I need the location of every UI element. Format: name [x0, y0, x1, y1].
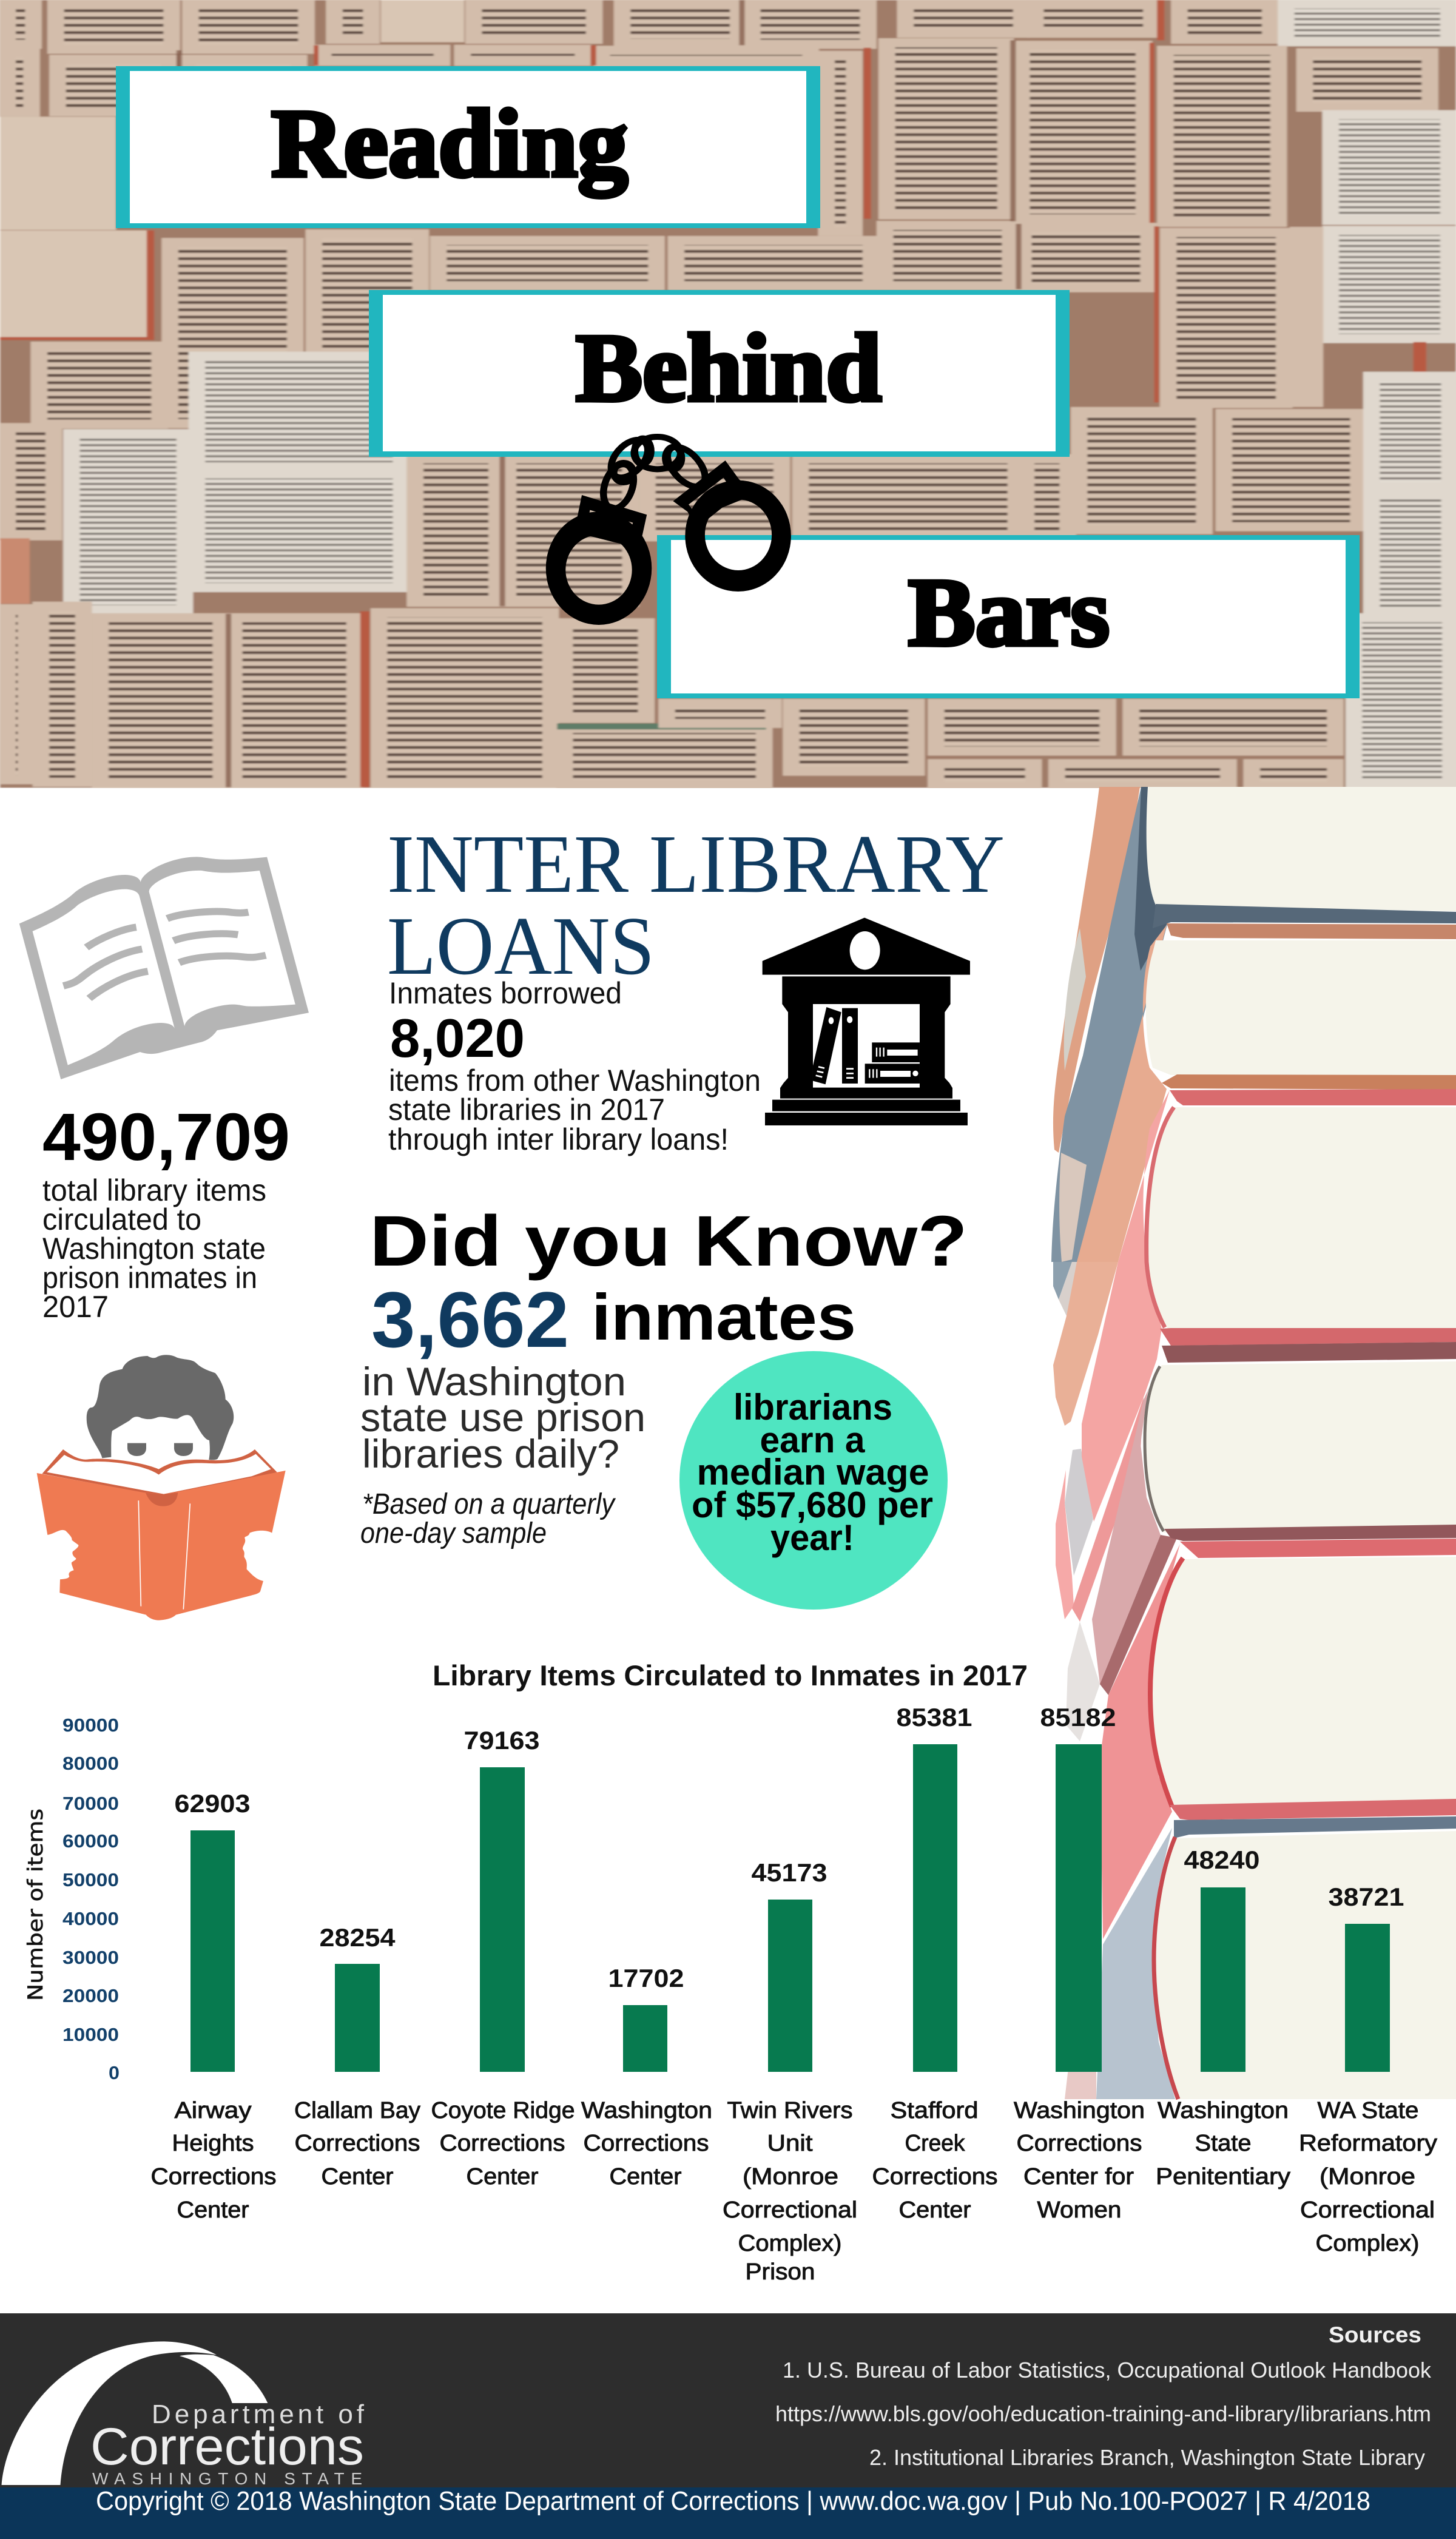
- logo: Department of Corrections: WASHINGTON STATE: [92, 2469, 362, 2488]
- callout: librarian median wage: median wage: [696, 1452, 929, 1492]
- photo: stack of books: [1051, 787, 1456, 2099]
- bar values: 85182: [1040, 1703, 1116, 1731]
- category labels: Clallam Bay: [294, 2098, 420, 2123]
- category labels: Prison: [745, 2259, 815, 2285]
- category labels: Stafford: [891, 2098, 978, 2123]
- category labels: Twin Rivers: [727, 2098, 853, 2123]
- callout: librarian median wage: librarians: [733, 1387, 892, 1428]
- category labels: Airway: [175, 2098, 251, 2123]
- chart title: Library Items Circulated to Inmates in 2017: [433, 1659, 1028, 1691]
- copyright bar: Copyright © 2018 Washington State Department of Corrections | www.doc.wa.gov | Pub No.100-PO027 | R 4/2018: [96, 2486, 1370, 2516]
- category labels: Center: [609, 2164, 682, 2190]
- y axis ticks: 40000: [62, 1908, 119, 1929]
- y axis ticks: 60000: [62, 1830, 119, 1852]
- logo: Department of Corrections: Corrections: [90, 2418, 364, 2476]
- logo: Department of Corrections: [2, 2341, 365, 2488]
- footer panel: [0, 2313, 1456, 2539]
- stat: 490,709 total items: prison inmates in: [42, 1261, 257, 1295]
- title box: Bars: [657, 535, 1360, 698]
- bar values: 17702: [608, 1964, 684, 1992]
- category labels: Corrections: [1017, 2131, 1142, 2156]
- text block: inter library loans stat: [388, 976, 761, 1156]
- heading: Inter Library Loans: INTER LIBRARY: [387, 818, 1005, 910]
- category labels: Penitentiary: [1156, 2164, 1290, 2190]
- icon: handcuffs: [546, 434, 791, 625]
- category labels: (Monroe: [743, 2164, 838, 2190]
- category labels: Correctional: [1300, 2197, 1435, 2223]
- y axis title: Number of items: [24, 1809, 48, 2001]
- stat: 3,662 inmates: 3,662: [371, 1275, 569, 1364]
- category labels: Corrections: [872, 2164, 997, 2190]
- sources: [775, 2322, 1432, 2470]
- y axis ticks: 70000: [62, 1793, 119, 1814]
- category labels: Complex): [1315, 2231, 1420, 2256]
- y axis ticks: 20000: [62, 1985, 119, 2006]
- category labels: Coyote Ridge: [431, 2098, 575, 2123]
- footnote: quarterly sample: *Based on a quarterly: [362, 1488, 616, 1520]
- category labels: Center: [466, 2164, 539, 2190]
- stat: 3,662 inmates: [371, 1275, 856, 1364]
- title box: Reading: [116, 66, 820, 228]
- heading: Did you Know: Did you Know?: [369, 1201, 968, 1281]
- category labels: Complex): [738, 2231, 842, 2256]
- text block: use prison libraries daily: libraries daily?: [362, 1431, 619, 1476]
- y axis ticks: 0: [109, 2062, 120, 2083]
- footnote: quarterly sample: [360, 1488, 616, 1549]
- title box: Behind: Behind: [576, 314, 881, 422]
- sources: 1. U.S. Bureau of Labor Statistics, Occupational Outlook Handbook: [783, 2358, 1432, 2382]
- category labels: Creek: [905, 2131, 965, 2156]
- bar chart: library items circulated: [24, 1659, 1437, 2285]
- category labels: Corrections: [295, 2131, 420, 2156]
- callout: librarian median wage: earn a: [760, 1420, 865, 1460]
- callout: librarian median wage: of $57,680 per: [692, 1485, 933, 1525]
- logo: Department of Corrections: Department of: [152, 2399, 365, 2429]
- icon: person reading: [37, 1355, 286, 1620]
- category labels: Correctional: [723, 2197, 857, 2223]
- copyright bar: [0, 2486, 1456, 2539]
- text block: inter library loans stat: state libraries in 2017: [388, 1093, 665, 1127]
- text block: inter library loans stat: 8,020: [390, 1008, 525, 1069]
- stat: 490,709 total items: [42, 1100, 290, 1324]
- stat: 490,709 total items: circulated to: [42, 1202, 201, 1236]
- bar values: [175, 1703, 1404, 1992]
- y axis ticks: [62, 1715, 120, 2083]
- title box: Bars: Bars: [908, 558, 1110, 666]
- category labels: Unit: [767, 2131, 813, 2156]
- text block: inter library loans stat: items from other Washington: [389, 1064, 761, 1098]
- title box: Behind: [369, 290, 1070, 457]
- sources: 2. Institutional Libraries Branch, Washington State Library: [869, 2445, 1425, 2470]
- sources: https://www.bls.gov/ooh/education-training-and-library/librarians.htm: [775, 2401, 1431, 2426]
- bars: [190, 1744, 1390, 2072]
- callout: librarian median wage: year!: [770, 1517, 854, 1558]
- text block: inter library loans stat: through inter library loans!: [388, 1122, 729, 1156]
- text block: inter library loans stat: Inmates borrowed: [389, 976, 622, 1010]
- category labels: Corrections: [439, 2131, 565, 2156]
- heading: Inter Library Loans: LOANS: [387, 900, 655, 992]
- sources: Sources: [1329, 2322, 1421, 2347]
- category labels: WA State: [1318, 2098, 1418, 2123]
- y axis ticks: 50000: [62, 1869, 119, 1890]
- category labels: Center: [177, 2197, 249, 2223]
- category labels: Center: [322, 2164, 394, 2190]
- bar values: 48240: [1184, 1846, 1259, 1874]
- text block: use prison libraries daily: [360, 1359, 645, 1476]
- stat: 490,709 total items: total library items: [42, 1173, 266, 1207]
- y axis ticks: 10000: [62, 2024, 119, 2045]
- stat: 3,662 inmates: inmates: [592, 1280, 856, 1354]
- category labels: Center: [899, 2197, 971, 2223]
- bar values: 62903: [175, 1789, 250, 1818]
- category labels: State: [1195, 2131, 1251, 2156]
- icon: library building: [763, 918, 970, 1125]
- category labels: Washington: [1158, 2098, 1289, 2123]
- category labels: Washington: [581, 2098, 712, 2123]
- title box: Reading: Reading: [271, 89, 628, 198]
- category labels: Washington: [1014, 2098, 1145, 2123]
- y axis ticks: 90000: [62, 1715, 119, 1736]
- text block: use prison libraries daily: state use prison: [360, 1395, 645, 1440]
- background photo: wall of open books: [0, 0, 1456, 788]
- category labels: (Monroe: [1320, 2164, 1415, 2190]
- y axis ticks: 30000: [62, 1947, 119, 1968]
- bar values: 45173: [751, 1858, 827, 1887]
- bar values: 79163: [463, 1726, 540, 1755]
- callout: librarian median wage: [679, 1351, 948, 1610]
- category labels: Heights: [172, 2131, 254, 2156]
- category labels: Corrections: [584, 2131, 709, 2156]
- stat: 490,709 total items: Washington state: [42, 1232, 266, 1266]
- category labels: Reformatory: [1299, 2131, 1437, 2156]
- text block: use prison libraries daily: in Washington: [362, 1359, 626, 1404]
- header panel: [0, 0, 1456, 788]
- category labels: [150, 2098, 1437, 2285]
- footnote: quarterly sample: one-day sample: [360, 1517, 547, 1549]
- bar values: 28254: [319, 1923, 396, 1952]
- category labels: Center for: [1023, 2164, 1134, 2190]
- category labels: Corrections: [150, 2164, 277, 2190]
- icon: open book: [19, 857, 309, 1079]
- y axis ticks: 80000: [62, 1753, 119, 1774]
- stat: 490,709 total items: 490,709: [42, 1100, 290, 1175]
- bar values: 38721: [1329, 1883, 1404, 1911]
- stat: 490,709 total items: 2017: [42, 1290, 109, 1324]
- bar values: 85381: [897, 1703, 972, 1731]
- category labels: Women: [1037, 2197, 1121, 2223]
- heading: Inter Library Loans: [387, 818, 1005, 992]
